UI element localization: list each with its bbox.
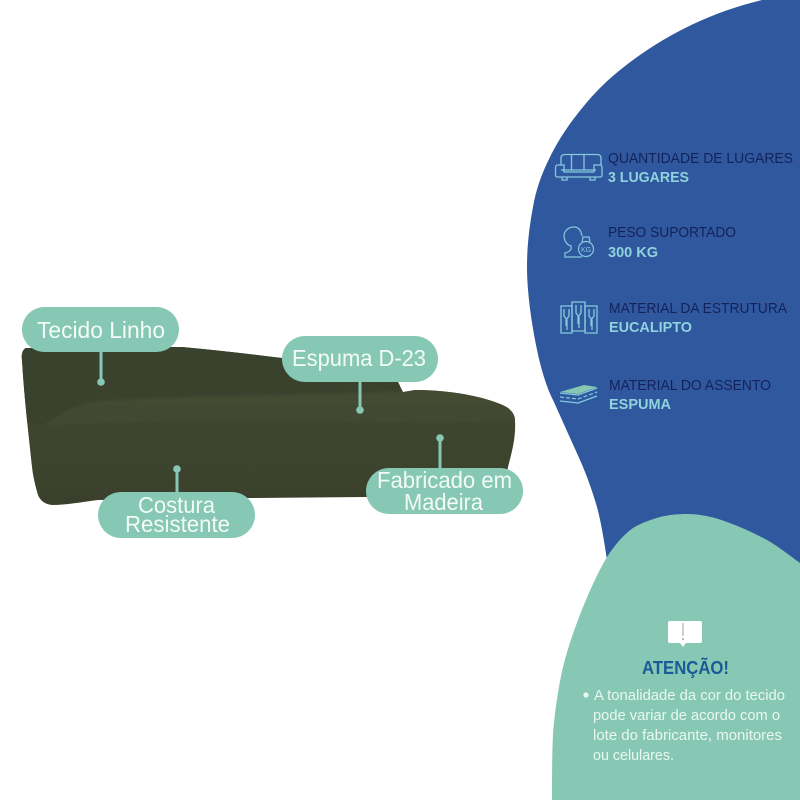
specification: quantidade de lugares: [608, 150, 793, 186]
callout: Fabricado em Madeira: Fabricado em: [377, 467, 512, 493]
specification: peso suportado: 300 KG: [608, 244, 658, 261]
callout: Tecido Linho: Tecido Linho: [37, 317, 165, 343]
text block: attention note: [583, 687, 785, 764]
icon: weight and head: KG: [581, 247, 591, 254]
sofa illustration: [22, 347, 516, 505]
specification: material da estrutura: MATERIAL DA ESTRUTURA: [609, 300, 787, 317]
icon: foam layers: [560, 385, 597, 403]
specification: material do assento: MATERIAL DO ASSENTO: [609, 377, 771, 394]
specification: material da estrutura: EUCALIPTO: [609, 319, 692, 336]
icon: alert speech bubble: [668, 621, 702, 647]
specification: peso suportado: [608, 224, 736, 261]
callout: Costura Resistente: Costura: [138, 492, 215, 518]
text block: attention note: A tonalidade da cor do tecido: [594, 687, 785, 704]
specification: material do assento: ESPUMA: [609, 396, 671, 413]
specification: quantidade de lugares: 3 LUGARES: [608, 169, 689, 186]
heading: atenção: ATENÇÃO!: [642, 657, 729, 678]
specification: peso suportado: PESO SUPORTADO: [608, 224, 736, 241]
icon: wood planks: [561, 302, 597, 333]
panel: blue background shape: [527, 0, 800, 600]
icon: weight and head: [564, 227, 594, 257]
specification: material do assento: [609, 377, 771, 413]
icon: sofa: [556, 154, 602, 180]
callout: Espuma D-23: Espuma D-23: [292, 345, 426, 371]
specification: material da estrutura: [609, 300, 787, 336]
callout: Espuma D-23: [282, 336, 438, 414]
callout: Fabricado em Madeira: [366, 434, 523, 515]
text block: attention note: ou celulares.: [593, 747, 674, 764]
callout: Fabricado em Madeira: Madeira: [404, 489, 483, 515]
text block: attention note: lote do fabricante, monitores: [593, 727, 782, 744]
callout: Costura Resistente: Resistente: [125, 511, 230, 537]
panel: teal attention shape: [552, 514, 800, 800]
callout: Tecido Linho: [22, 307, 179, 386]
callout: Costura Resistente: [98, 465, 255, 538]
text block: attention note: pode variar de acordo com o: [593, 707, 780, 724]
